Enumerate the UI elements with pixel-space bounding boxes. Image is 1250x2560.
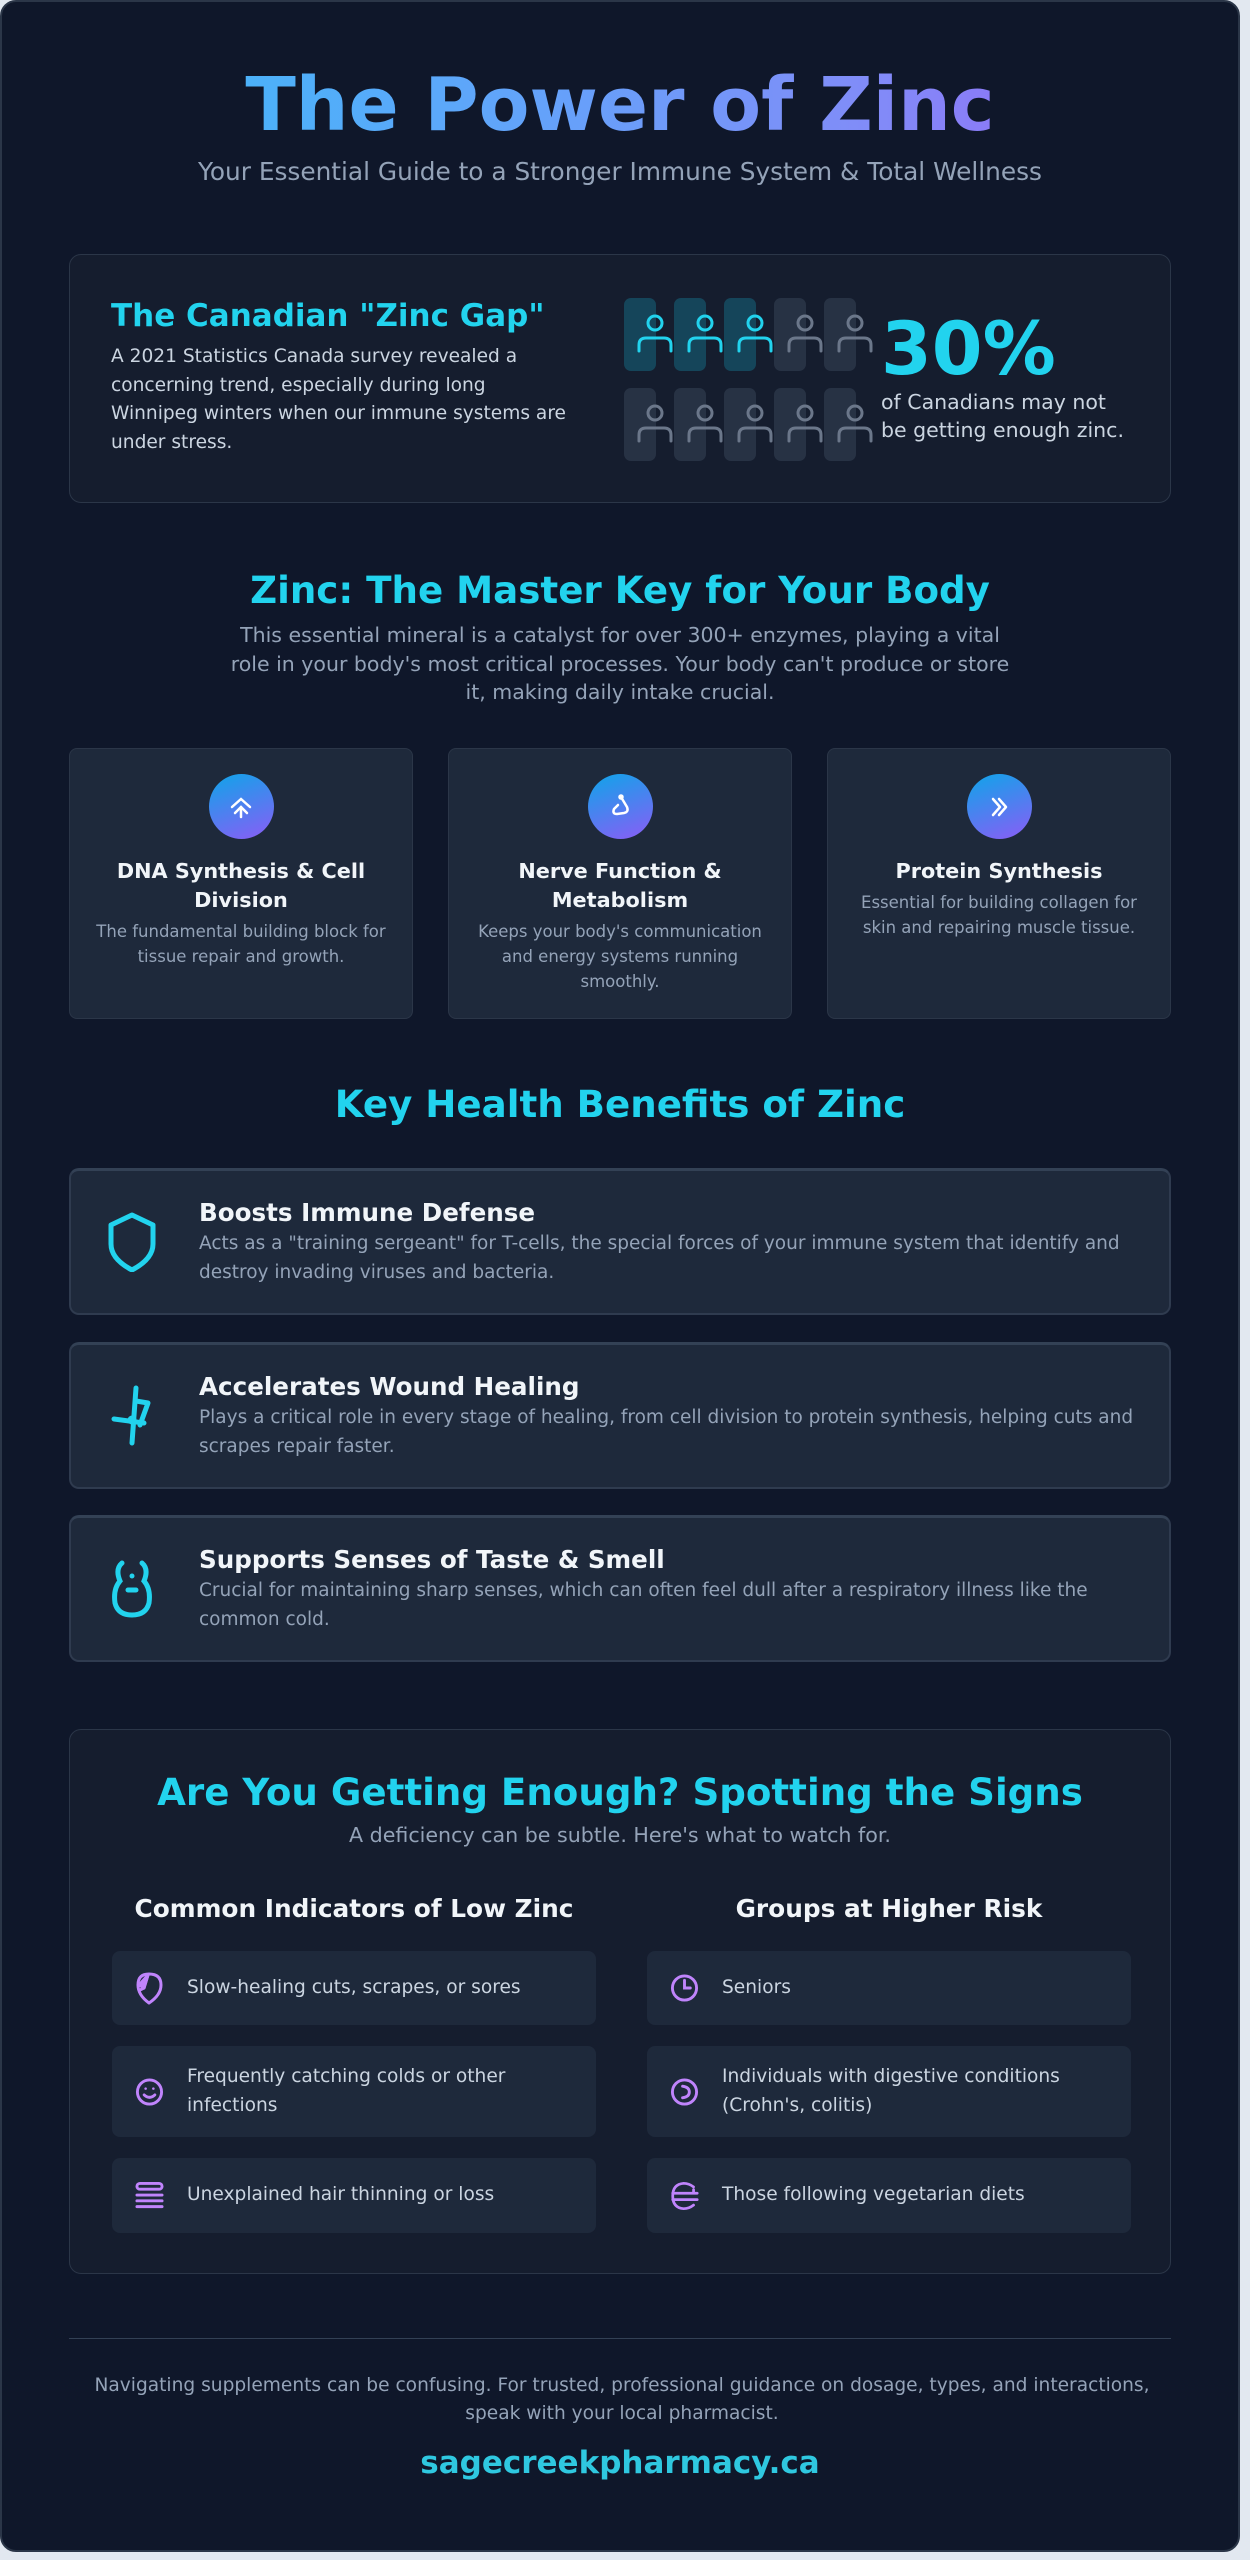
title <box>2 68 1238 142</box>
icon: protein <box>966 774 1032 839</box>
icon: nerve <box>588 774 652 839</box>
benefit text: Plays a critical role in every stage of healing, from cell division to protein synthesis, helping cuts and scrapes repair faster. <box>199 1407 1133 1456</box>
heading: master key: Zinc: The Master Key for Your Body <box>250 568 990 612</box>
card: nerve function <box>448 748 792 1019</box>
item: vegetarian <box>647 2158 1131 2233</box>
card text: The fundamental building block for tissue repair and growth. <box>96 922 386 966</box>
item: seniors: Seniors <box>722 1977 791 1998</box>
benefit title: Boosts Immune Defense <box>199 1198 535 1227</box>
card: DNA synthesis <box>69 748 413 1019</box>
stat: 30%: 30% <box>881 307 1056 392</box>
card text: Essential for building collagen for skin and repairing muscle tissue. <box>861 893 1137 937</box>
benefit text: Crucial for maintaining sharp senses, which can often feel dull after a respiratory illness like the common cold. <box>199 1580 1088 1630</box>
pictogram: 3 of 10 people <box>624 298 872 461</box>
heading: key health benefits: Key Health Benefits of Zinc <box>335 1082 905 1126</box>
text: intro paragraph: This essential mineral is a catalyst for over 300+ enzymes, playing a vital role in your body's most critical processes. Your body can't produce or store it, making daily intake crucial. <box>231 623 1009 704</box>
item: hair thinning: Unexplained hair thinning or loss <box>187 2184 494 2205</box>
icon: wound healing <box>112 1386 150 1446</box>
item: digestive: Individuals with digestive conditions (Crohn's, colitis) <box>722 2066 1060 2116</box>
card title: Protein Synthesis <box>895 859 1103 883</box>
benefit title: Accelerates Wound Healing <box>199 1372 580 1401</box>
stat caption: of Canadians may not be getting enough zinc. <box>881 390 1124 442</box>
footer text: Navigating supplements can be confusing. For trusted, professional guidance on dosage, types, and interactions, speak with your local pharmacist. <box>94 2375 1150 2424</box>
item: vegetarian: Those following vegetarian diets <box>722 2184 1025 2205</box>
card text: Keeps your body's communication and energy systems running smoothly. <box>478 922 762 991</box>
item: seniors <box>647 1951 1131 2025</box>
icon: shield <box>108 1212 156 1272</box>
card title: DNA Synthesis & Cell Division <box>117 859 365 912</box>
title: The Power of Zinc <box>245 62 995 148</box>
subtitle: Your Essential Guide to a Stronger Immune System & Total Wellness <box>198 157 1042 186</box>
item: slow healing: Slow-healing cuts, scrapes, or sores <box>187 1977 521 1998</box>
column heading: indicators: Common Indicators of Low Zinc <box>134 1894 573 1923</box>
item: frequent colds: Frequently catching colds or other infections <box>187 2066 505 2116</box>
card title: Nerve Function & Metabolism <box>518 859 722 912</box>
panel: Canadian zinc gap <box>69 254 1171 503</box>
heading: signs: Are You Getting Enough? Spotting the Signs <box>157 1770 1083 1814</box>
icon: DNA <box>208 774 274 839</box>
item: frequent colds <box>112 2046 596 2137</box>
benefit: wound healing <box>69 1342 1171 1489</box>
card: protein synthesis <box>827 748 1171 1019</box>
benefit text: Acts as a "training sergeant" for T-cells, the special forces of your immune system that identify and destroy invading viruses and bacteria. <box>199 1233 1120 1282</box>
item: hair thinning <box>112 2158 596 2233</box>
benefit title: Supports Senses of Taste & Smell <box>199 1545 665 1574</box>
benefit: taste and smell <box>69 1515 1171 1662</box>
benefit: immune defense <box>69 1168 1171 1315</box>
panel: spotting the signs <box>69 1729 1171 2274</box>
column heading: risk groups: Groups at Higher Risk <box>736 1894 1042 1923</box>
text: survey description: A 2021 Statistics Canada survey revealed a concerning trend, especially during long Winnipeg winters when our immune systems are under stress. <box>111 346 566 452</box>
subheading: A deficiency can be subtle. Here's what to watch for. <box>349 1823 891 1847</box>
footer url: sagecreekpharmacy.ca <box>420 2445 820 2481</box>
heading: zinc gap: The Canadian "Zinc Gap" <box>111 298 544 334</box>
item: digestive <box>647 2046 1131 2137</box>
icon: nose <box>112 1560 152 1618</box>
item: slow healing <box>112 1951 596 2025</box>
